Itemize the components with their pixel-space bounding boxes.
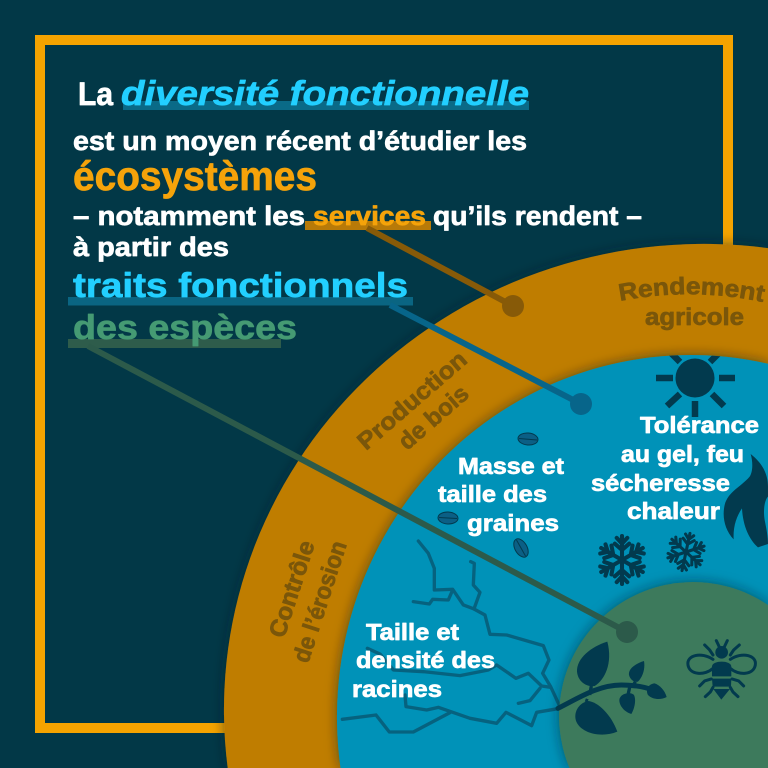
label: Contrôle de l'érosion: Contrôle [264, 537, 321, 641]
icon: leafy branch [558, 642, 667, 735]
connector: species [88, 346, 638, 643]
heading text [73, 75, 642, 347]
panel: services ring [224, 244, 768, 768]
trait labels [352, 412, 759, 702]
text: Taille et densité des racines: Taille et [366, 619, 459, 645]
panel: species circle [559, 582, 768, 768]
underline: des espèces [68, 339, 281, 348]
label: Contrôle de l'érosion: de l’érosion [288, 538, 353, 666]
panel: traits circle [337, 355, 768, 768]
text: Taille et densité des racines: densité des [356, 647, 495, 673]
label: Rendement agricole [618, 276, 766, 331]
text: Masse et taille des graines: graines [467, 510, 559, 536]
label: Production de bois: Production [352, 346, 473, 456]
text: Masse et taille des graines: Masse et [458, 453, 564, 479]
icon: flame [724, 454, 768, 547]
text: Taille et densité des racines [352, 619, 495, 702]
icon: bee [688, 641, 755, 700]
text: Tolérance au gel, feu, sécheresse, chaleur: sécheresse [591, 470, 730, 496]
text: est un moyen récent: est un moyen récent d’étudier les [73, 126, 527, 156]
connector: traits [390, 305, 592, 415]
text: Masse et taille des graines: taille des [438, 481, 547, 507]
icon: sun [656, 350, 735, 417]
text: à partir des: à partir des [73, 232, 229, 262]
heading highlight: diversité fonctionnelle: diversité fonctionnelle [121, 75, 529, 113]
underline: traits fonctionnels [68, 297, 413, 306]
label: Rendement agricole: Rendement [618, 276, 766, 302]
text: Tolérance au gel, feu, sécheresse, chaleur: au gel, feu [621, 441, 744, 467]
icon: roots [342, 541, 560, 732]
text: notamment les: – notamment les [73, 201, 305, 231]
label: Rendement agricole: agricole [645, 304, 744, 331]
text: qu'ils rendent: qu’ils rendent – [433, 201, 642, 231]
label: Production de bois: de bois [393, 380, 474, 456]
heading line: La diversité fonctionnelle: La [78, 76, 113, 112]
text: services: services [313, 201, 426, 231]
text: Taille et densité des racines: racines [352, 676, 442, 702]
ring labels [264, 262, 768, 704]
underline: diversité fonctionnelle [123, 101, 529, 110]
connector: services [367, 228, 524, 317]
text: écosystèmes: écosystèmes [73, 153, 317, 199]
text: Masse et taille des graines [438, 453, 564, 536]
label: Contrôle de l'érosion [264, 537, 353, 666]
text: traits fonctionnels: traits fonctionnels [73, 267, 408, 305]
icon: snowflake large [598, 536, 646, 584]
text: Tolérance au gel, feu, sécheresse, chaleur: Tolérance [640, 412, 759, 438]
text: Tolérance au gel, feu, sécheresse, chaleur [591, 412, 759, 524]
icon: snowflake small [663, 529, 709, 575]
text: Tolérance au gel, feu, sécheresse, chaleur: chaleur [627, 498, 720, 524]
underline: services [305, 221, 431, 230]
icon: seeds [438, 432, 538, 560]
text: des espèces: des espèces [73, 309, 297, 347]
